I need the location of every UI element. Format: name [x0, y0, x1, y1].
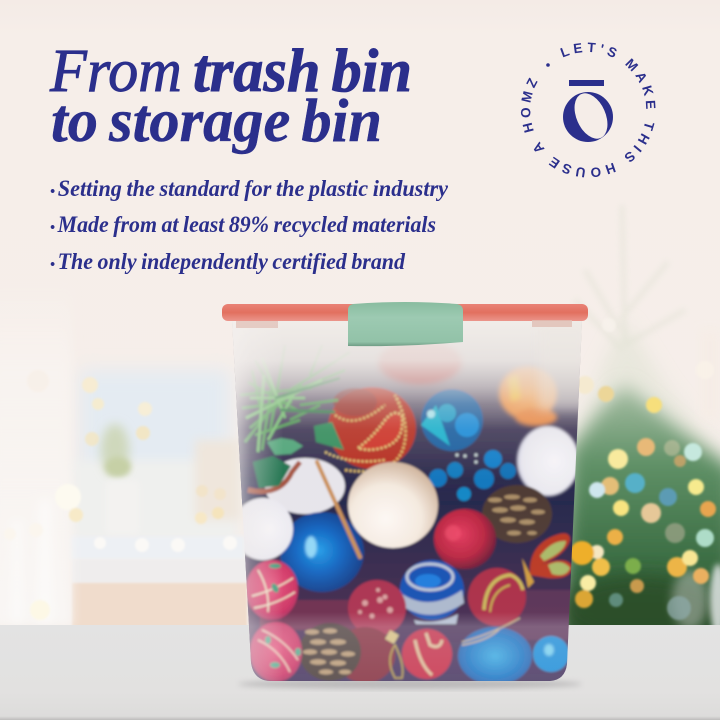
ornament: pine cone right — [482, 485, 552, 543]
storage bin with ornaments — [222, 302, 590, 685]
tinsel — [380, 346, 460, 386]
logo letter o — [563, 88, 614, 144]
ornament: orange ball — [499, 366, 557, 426]
ornament: red and gold — [325, 387, 416, 471]
bullet list — [50, 176, 449, 274]
ornament: teal ball — [421, 389, 483, 451]
string — [462, 618, 520, 645]
ornament: red ball — [434, 509, 496, 569]
ornament: blue bottom — [458, 627, 532, 685]
ornament: pink bottom left — [250, 622, 302, 682]
bullet one: • Setting the standard for the plastic industry — [50, 176, 449, 201]
left bokeh lights — [4, 370, 237, 620]
window and sill — [70, 370, 247, 628]
circular slogan: LET'S MAKE THIS HOUSE A HOMZ — [520, 42, 656, 178]
ornament: dark red middle — [346, 626, 396, 681]
lower dark maroon — [506, 590, 570, 641]
background: blurred room — [0, 306, 720, 625]
curtain — [0, 280, 72, 626]
ornament: butterfly decoration — [522, 533, 572, 588]
bullet two: • Made from at least 89% recycled materials — [50, 212, 436, 237]
lid red rim — [222, 304, 588, 328]
ornament: cream large ball — [348, 462, 438, 548]
ornament: red bottom — [385, 629, 452, 679]
ornament: small bright blue — [533, 636, 569, 672]
ornament: glitter blue cluster — [429, 450, 516, 501]
ornament: pine greenery — [242, 367, 345, 489]
title line two: to storage bin — [51, 88, 382, 155]
tree lights — [570, 318, 716, 620]
title: From trash bin — [49, 38, 412, 105]
ornament: blue large ball — [280, 512, 364, 592]
ornament: red with gold swirl — [468, 568, 526, 626]
christmas tree — [568, 306, 720, 625]
bin body contents — [225, 320, 590, 685]
ornament: red glitter — [348, 580, 406, 636]
ornament: gold ring behind — [248, 462, 300, 492]
ornament: striped blue — [400, 560, 464, 624]
logo macron bar — [569, 80, 604, 86]
ornament: pale wedge — [265, 458, 345, 514]
lid green clasp — [348, 302, 463, 346]
badge dot — [546, 63, 550, 67]
plant and vase — [101, 424, 140, 535]
ornament: pine cone bottom — [299, 623, 361, 681]
frosted plastic overlay — [225, 320, 590, 685]
ornament: pink left — [246, 560, 298, 620]
marble counter — [0, 625, 720, 720]
ornament: cinnamon stick — [317, 462, 360, 557]
bin shadow — [238, 679, 582, 689]
ornament: white right — [517, 426, 579, 496]
badge logo — [520, 42, 656, 178]
ornament: left white ball — [233, 498, 293, 560]
bullet three: • The only independently certified brand — [50, 249, 405, 274]
